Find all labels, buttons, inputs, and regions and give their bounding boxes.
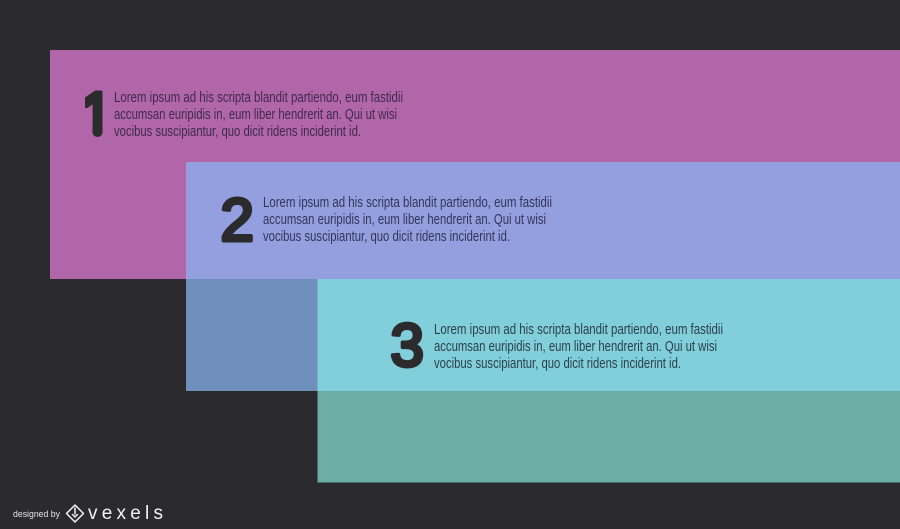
panel: step 3 bbox=[318, 279, 900, 482]
text block 1 bbox=[114, 90, 403, 140]
text block 1: Lorem ipsum ad his scripta blandit partiendo, eum fastidii bbox=[114, 90, 403, 106]
text block 2: accumsan euripidis in, eum liber hendrerit an. Qui ut wisi bbox=[263, 212, 546, 228]
text block 3: Lorem ipsum ad his scripta blandit partiendo, eum fastidii bbox=[434, 322, 723, 338]
icon: vexels diamond bbox=[66, 505, 84, 522]
number 3: 3 bbox=[390, 312, 424, 379]
text block 1: accumsan euripidis in, eum liber hendrerit an. Qui ut wisi bbox=[114, 107, 397, 123]
designed by label: designed by bbox=[13, 509, 60, 520]
number 1: 1 bbox=[80, 81, 114, 148]
text block 1: vocibus suscipiantur, quo dicit ridens inciderint id. bbox=[114, 124, 361, 140]
panel: step 2 bbox=[186, 162, 900, 391]
vexels wordmark: vexels bbox=[88, 503, 163, 524]
text block 3 bbox=[434, 322, 723, 372]
text block 3: vocibus suscipiantur, quo dicit ridens inciderint id. bbox=[434, 356, 681, 372]
number 2: 2 bbox=[220, 186, 254, 254]
text block 3: accumsan euripidis in, eum liber hendrerit an. Qui ut wisi bbox=[434, 339, 717, 355]
brand credit bbox=[13, 503, 163, 524]
text block 2 bbox=[263, 195, 552, 245]
text block 2: vocibus suscipiantur, quo dicit ridens inciderint id. bbox=[263, 229, 510, 245]
panel: step 1 bbox=[50, 50, 900, 279]
text block 2: Lorem ipsum ad his scripta blandit partiendo, eum fastidii bbox=[263, 195, 552, 211]
